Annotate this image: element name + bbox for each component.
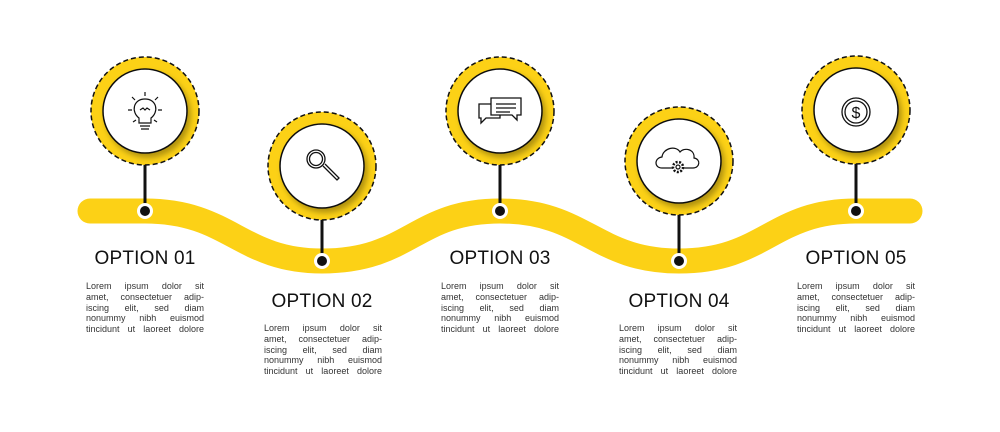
option 03 text: amet, consectetuer adip- [441,292,559,302]
option 04 text: amet, consectetuer adip- [619,334,737,344]
option 03 text: Lorem ipsum dolor sit [441,281,559,291]
option 01 text: nonummy nibh euismod [86,313,204,323]
option 02 text: tincidunt ut laoreet dolore [264,366,382,376]
option 02 text: iscing elit, sed diam [264,345,382,355]
step 1 marker [91,57,199,219]
step 5 marker [802,56,910,219]
step 2 marker [268,112,376,269]
option 01 title: OPTION 01 [94,248,196,269]
option 03 text: tincidunt ut laoreet dolore [441,324,559,334]
option 01 text: amet, consectetuer adip- [86,292,204,302]
option 04 text: Lorem ipsum dolor sit [619,323,737,333]
option 02 text: Lorem ipsum dolor sit [264,323,382,333]
icon: magnifier [307,150,339,180]
step 3 marker [446,57,554,219]
option 01 text: Lorem ipsum dolor sit [86,281,204,291]
option 01 text: iscing elit, sed diam [86,303,204,313]
option 02 title: OPTION 02 [271,291,373,312]
option 03 text [441,281,559,334]
option 05 text: Lorem ipsum dolor sit [797,281,915,291]
icon: chat [479,98,521,123]
option 03 text: iscing elit, sed diam [441,303,559,313]
option 05 title: OPTION 05 [805,248,907,269]
option 04 title: OPTION 04 [628,291,730,312]
icon: cloud gear [656,148,699,172]
option 04 text: nonummy nibh euismod [619,355,737,365]
option 04 text: tincidunt ut laoreet dolore [619,366,737,376]
option 05 text: amet, consectetuer adip- [797,292,915,302]
option 01 text: tincidunt ut laoreet dolore [86,324,204,334]
option 03 text: nonummy nibh euismod [441,313,559,323]
option 01 text [86,281,204,334]
step 4 marker [625,107,733,269]
option 05 text: iscing elit, sed diam [797,303,915,313]
option 05 text: tincidunt ut laoreet dolore [797,324,915,334]
option 03 title: OPTION 03 [449,248,551,269]
option 04 text: iscing elit, sed diam [619,345,737,355]
wave band [90,211,910,261]
option 02 text: nonummy nibh euismod [264,355,382,365]
icon: bulb [128,92,162,129]
icon: coin: $ [852,105,861,122]
option 05 text: nonummy nibh euismod [797,313,915,323]
option 02 text: amet, consectetuer adip- [264,334,382,344]
option 02 text [264,323,382,376]
icon: coin [842,98,870,126]
option 05 text [797,281,915,334]
option 04 text [619,323,737,376]
